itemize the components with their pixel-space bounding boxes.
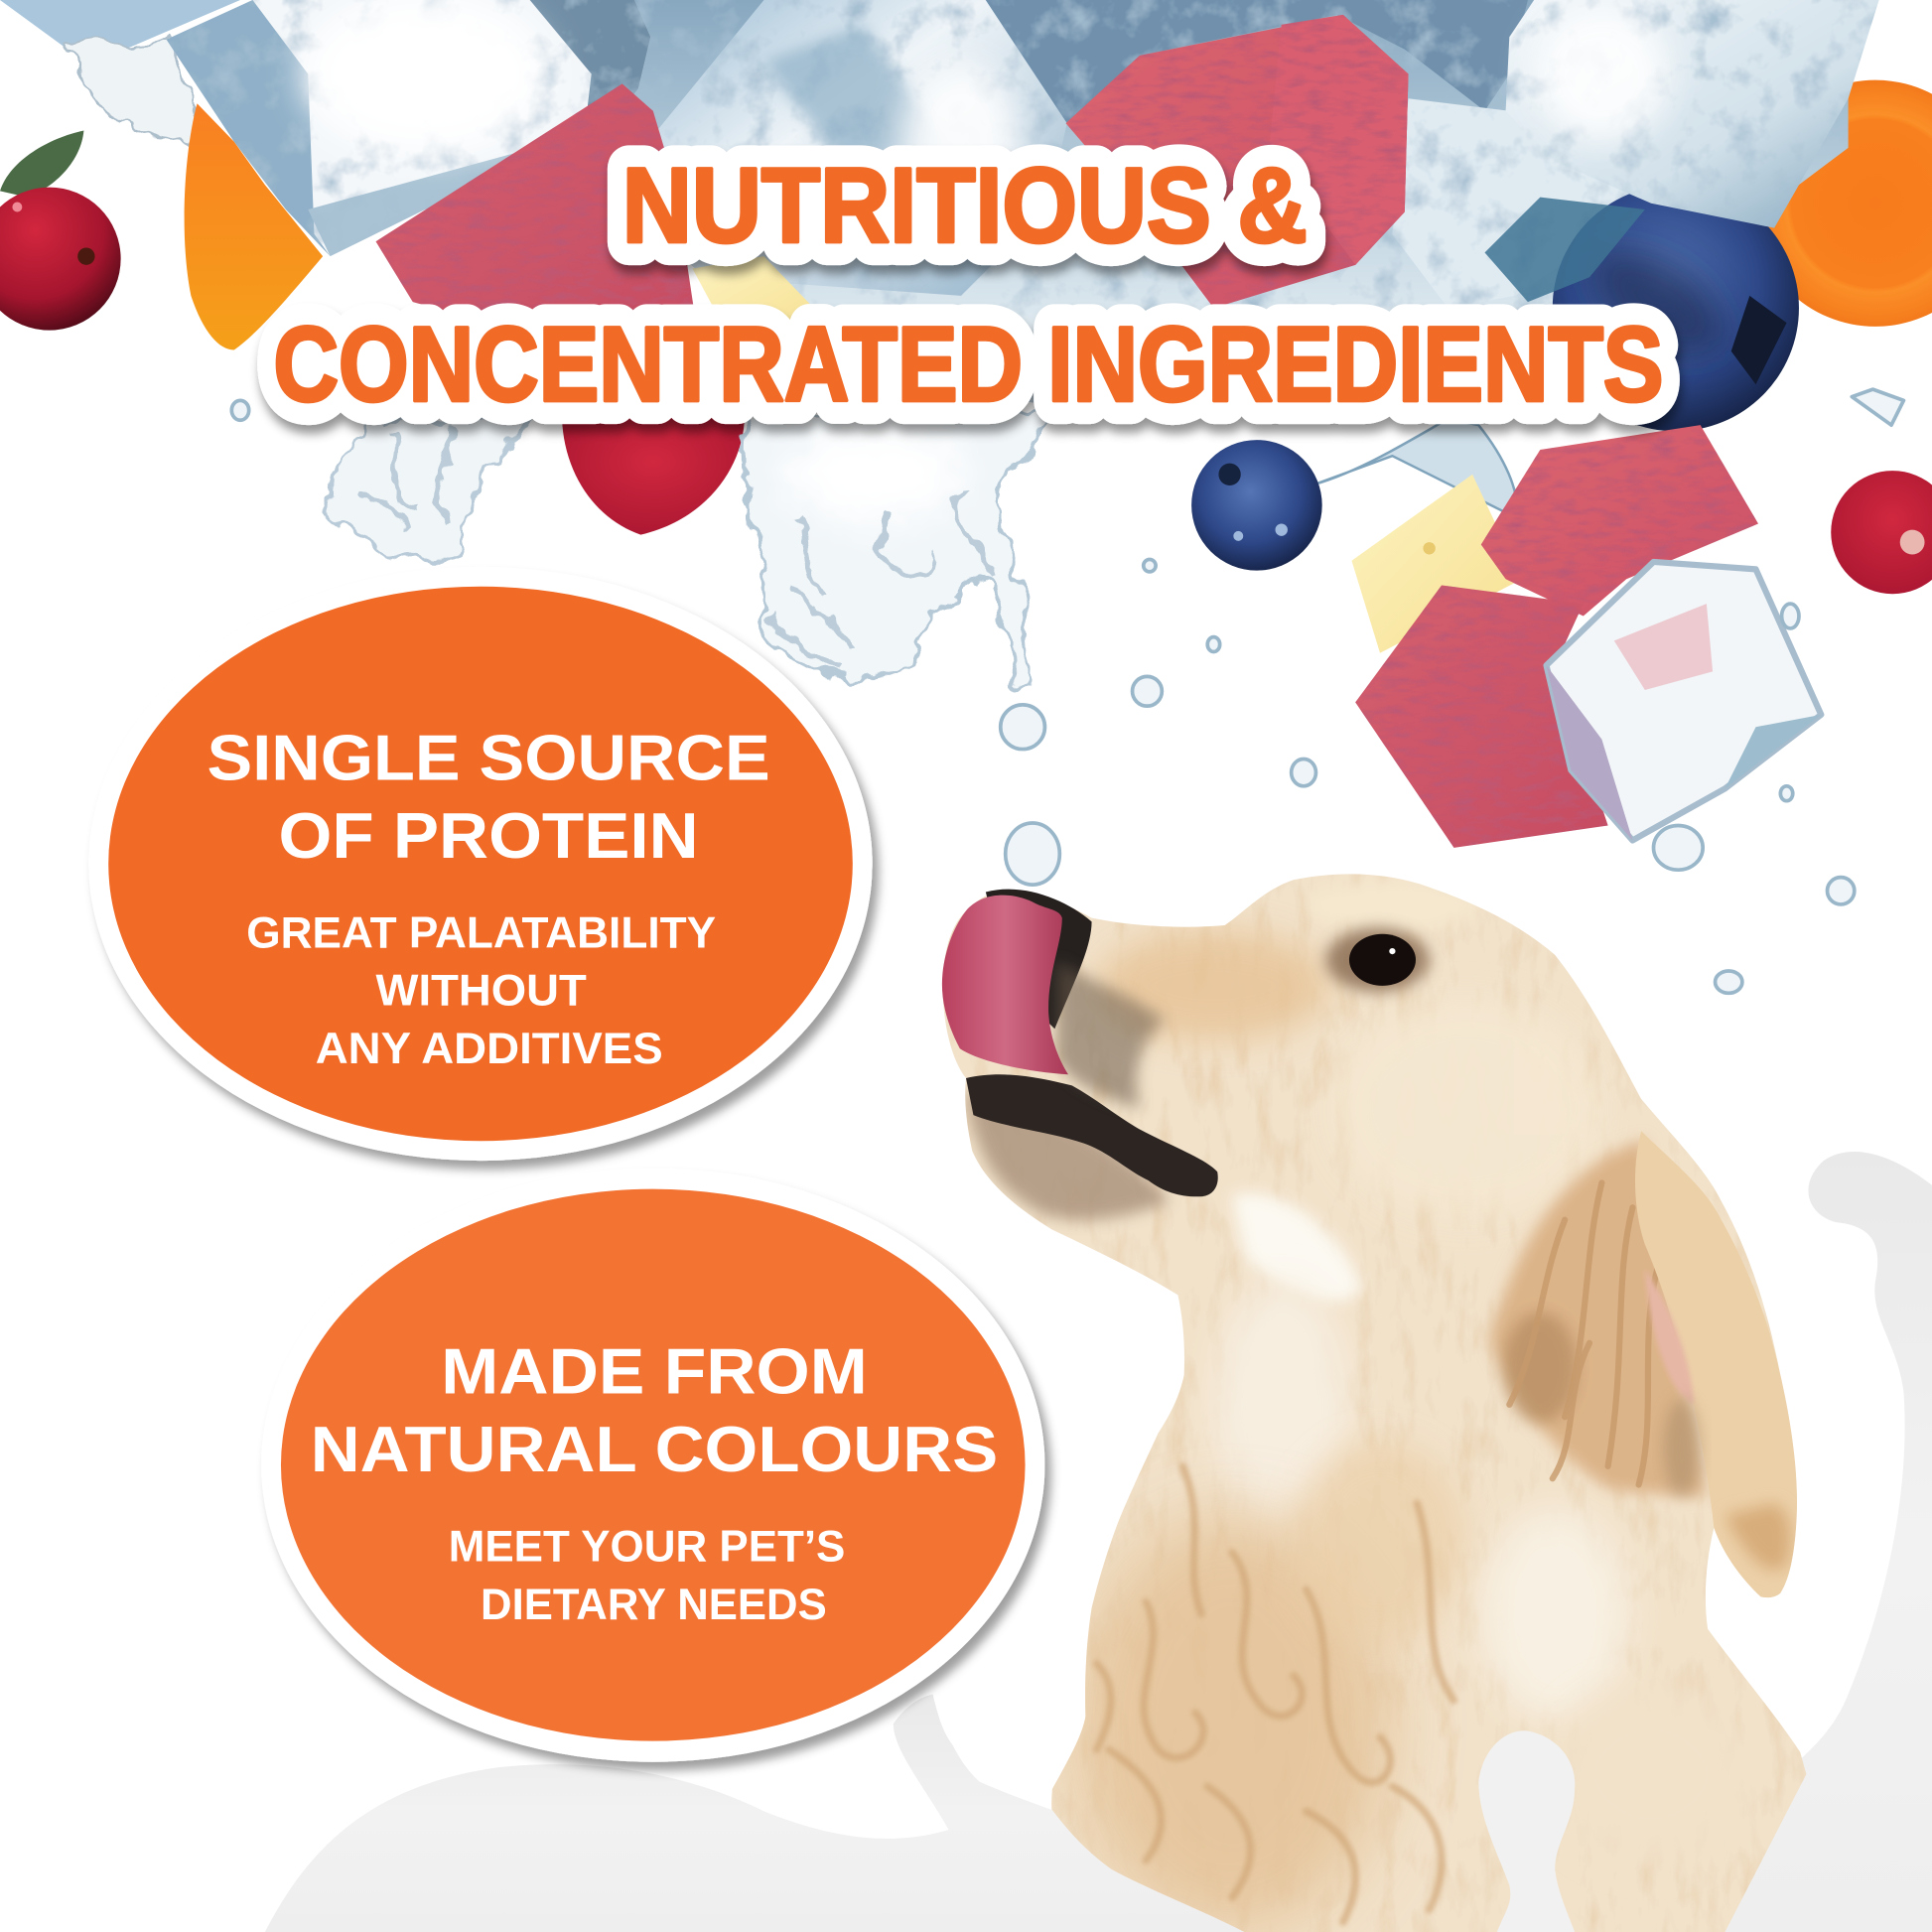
cranberry right — [1831, 471, 1932, 594]
dog — [924, 863, 1849, 1932]
meat cube right lower — [1355, 586, 1608, 848]
title lettering: NUTRITIOUS & — [622, 145, 1308, 264]
badge heading: SINGLE SOURCE — [207, 723, 770, 794]
ear fur strokes — [1509, 1182, 1657, 1484]
ice corner top left — [0, 0, 240, 56]
fur base — [924, 863, 1849, 1932]
ice fragment left edge — [65, 37, 215, 148]
eye patch — [1325, 928, 1430, 992]
tan muzzle and forehead shading — [1097, 930, 1330, 1041]
muzzle whisker shading — [1057, 961, 1165, 1109]
chest curls — [1097, 1466, 1453, 1922]
ice cube centre — [653, 0, 1067, 296]
badge subtext: WITHOUT — [376, 967, 587, 1016]
title lettering — [274, 145, 1663, 423]
badge heading: OF PROTEIN — [278, 800, 699, 872]
badge orange fill — [281, 1189, 1026, 1741]
badge white outline — [261, 1169, 1044, 1762]
water splash left — [331, 419, 530, 562]
ice cube top right — [1484, 0, 1879, 302]
splash right of meat — [1392, 98, 1651, 308]
badge heading — [207, 723, 770, 872]
title lettering: CONCENTRATED INGREDIENTS — [274, 304, 1663, 423]
chin — [966, 1090, 1171, 1220]
badge subtext — [449, 1522, 845, 1629]
carrot slice right — [1752, 80, 1932, 327]
transparent ice cube — [1547, 562, 1821, 840]
cranberry centre — [562, 413, 745, 535]
tongue — [942, 896, 1068, 1074]
big blueberry — [1553, 185, 1799, 431]
title outline: CONCENTRATED INGREDIENTS — [274, 304, 1663, 423]
ice cube top left — [167, 0, 650, 256]
milk splash right — [1714, 1152, 1932, 1932]
title — [274, 145, 1663, 423]
badge heading: NATURAL COLOURS — [311, 1414, 998, 1485]
chest tan fur — [1072, 1516, 1392, 1932]
pale neck — [1213, 1282, 1349, 1528]
badge: single source of protein — [88, 567, 873, 1161]
ice and water band across the top — [0, 0, 1849, 407]
ear flap — [1635, 1131, 1797, 1597]
dark ice top centre — [986, 0, 1528, 123]
small blueberry — [1191, 440, 1322, 571]
cheese wedge — [1351, 475, 1522, 653]
badge heading: MADE FROM — [441, 1336, 868, 1408]
badge subtext: ANY ADDITIVES — [316, 1025, 663, 1073]
milk lobe centre right — [1478, 1730, 1575, 1932]
meat cube right upper — [1481, 425, 1758, 617]
meat cube left — [376, 83, 694, 351]
badge orange fill — [108, 587, 853, 1141]
badge subtext: MEET YOUR PET’S — [449, 1522, 845, 1571]
badge white outline — [88, 567, 873, 1161]
badge heading — [311, 1336, 998, 1485]
title outline: NUTRITIOUS & — [622, 145, 1308, 264]
badge: made from natural colours — [261, 1169, 1044, 1762]
carrot slice left — [185, 103, 323, 349]
eye — [1349, 934, 1416, 986]
badge subtext — [246, 908, 716, 1073]
nose — [986, 890, 1092, 1029]
mouth lip — [966, 1074, 1218, 1196]
ice shard over blueberry — [1484, 198, 1645, 302]
title outline — [274, 145, 1663, 423]
milk splash left — [265, 1694, 1244, 1932]
ear base shading — [1489, 1140, 1707, 1497]
inner ear — [1645, 1269, 1694, 1405]
splash strands right — [1307, 419, 1517, 517]
meat cube centre — [1066, 15, 1409, 308]
badge subtext: DIETARY NEEDS — [481, 1581, 827, 1629]
white throat — [1232, 1193, 1361, 1302]
water splash centre — [743, 413, 1047, 691]
cheese piece behind title — [692, 256, 828, 333]
water droplets — [231, 389, 1903, 993]
cranberry left with leaf — [0, 131, 121, 331]
badge subtext: GREAT PALATABILITY — [246, 908, 716, 957]
